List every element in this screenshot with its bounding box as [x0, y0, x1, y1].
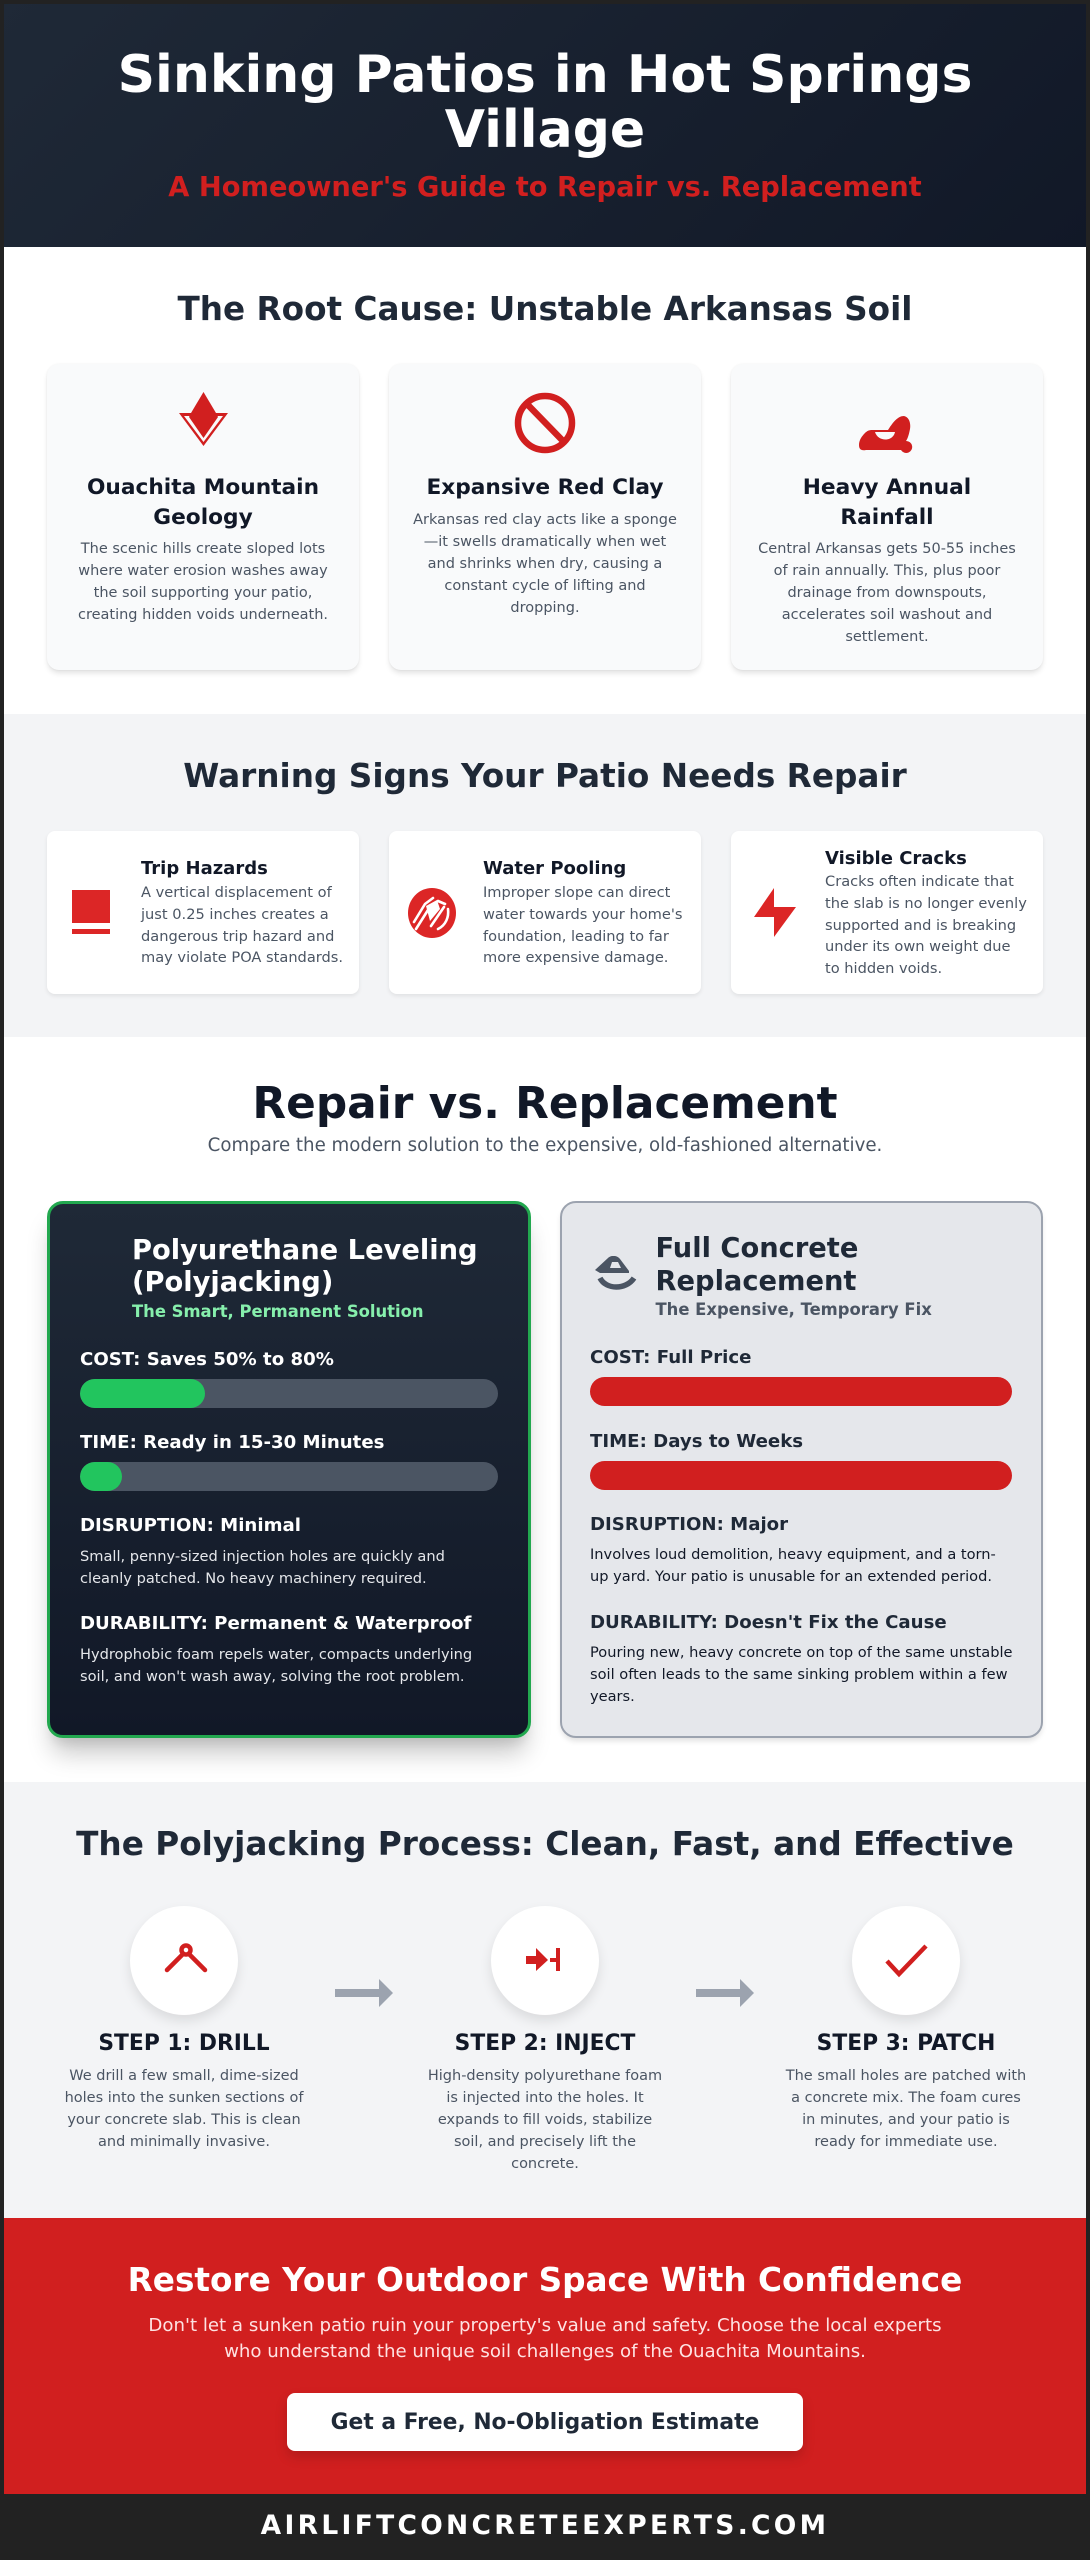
card: Heavy Annual Rainfall: accelerates soil washout and: [782, 607, 992, 623]
step 2: inject: [428, 1906, 662, 2172]
card: Trip Hazards: just 0.25 inches creates a: [141, 906, 329, 923]
step 3: patch: The small holes are patched with: [786, 2068, 1026, 2084]
card: Trip Hazards: [47, 831, 359, 994]
card title: full concrete: [656, 1232, 858, 1296]
step 1: drill: [65, 1906, 304, 2150]
card: Ouachita Mountain Geology: the soil supporting your patio,: [94, 585, 312, 601]
card: Visible Cracks: Cracks often indicate that: [825, 873, 1014, 890]
subheading: compare: Compare the modern solution to the expensive, old-fashioned alternative.: [208, 1135, 882, 1156]
text: durability detail: years.: [590, 1688, 635, 1705]
text: durability detail: [590, 1644, 1013, 1705]
text: disruption detail: up yard. Your patio is unusable for an extended period.: [590, 1568, 992, 1585]
icon: demolition trowel: [595, 1256, 636, 1290]
card subtitle: expensive: The Expensive, Temporary Fix: [656, 1300, 932, 1319]
button: free estimate: [287, 2393, 803, 2451]
card: Heavy Annual Rainfall: Rainfall: [840, 504, 934, 530]
panel: process section: [0, 1782, 1090, 2218]
card: Expansive Red Clay: —it swells dramatically when wet: [424, 534, 666, 550]
title: Village: [445, 100, 645, 160]
step 3: patch: STEP 3: PATCH: [817, 2031, 995, 2056]
card: Water Pooling: water towards your home's: [483, 906, 682, 923]
card: Ouachita Mountain Geology: where water erosion washes away: [78, 563, 328, 579]
card: Expansive Red Clay: and shrinks when dry, causing a: [428, 556, 662, 572]
text: disruption detail: Involves loud demolition, heavy equipment, and a torn-: [590, 1546, 996, 1563]
icon circle: inject: [491, 1906, 599, 2015]
card: Visible Cracks: the slab is no longer evenly: [825, 895, 1027, 912]
panel: warning signs section: [0, 714, 1090, 1037]
title: [118, 45, 972, 160]
icon: crack bolt: [754, 888, 796, 937]
text: durability detail: soil often leads to the same sinking problem within a few: [590, 1666, 1008, 1683]
card: Ouachita Mountain Geology: Ouachita Mountain: [87, 475, 319, 500]
step 1: drill: We drill a few small, dime-sized: [69, 2068, 299, 2084]
bar: cost 30 percent: [80, 1379, 498, 1408]
step 2: inject: STEP 2: INJECT: [455, 2031, 635, 2056]
heading: process: The Polyjacking Process: Clean, Fast, and Effective: [76, 1825, 1014, 1863]
step 3: patch: in minutes, and your patio is: [802, 2112, 1010, 2128]
title: Sinking Patios in Hot Springs: [118, 45, 972, 105]
text: call to action: who understand the unique soil challenges of the Ouachita Mountains.: [224, 2340, 866, 2362]
heading: root cause: The Root Cause: Unstable Arkansas Soil: [178, 290, 912, 328]
icon: trip hazard block: [72, 890, 110, 934]
card title: full concrete: Replacement: [656, 1266, 856, 1296]
panel: polyurethane leveling: [47, 1201, 530, 1738]
step 3: patch: [786, 1906, 1026, 2150]
card: Water Pooling: foundation, leading to far: [483, 928, 669, 945]
button: free estimate: Get a Free, No-Obligation Estimate: [331, 2410, 759, 2435]
arrow: step 2 to 3: [696, 1979, 754, 2007]
bar: time full: [590, 1461, 1012, 1490]
text: disruption detail: cleanly patched. No heavy machinery required.: [80, 1570, 427, 1586]
step 2: inject: expands to fill voids, stabilize: [438, 2112, 652, 2128]
metric: disruption: DISRUPTION: Major: [590, 1514, 788, 1535]
step 2: inject: concrete.: [511, 2156, 579, 2172]
card: Water Pooling: [389, 831, 701, 994]
card: Visible Cracks: under its own weight due: [825, 938, 1010, 955]
card title: full concrete: Full Concrete: [656, 1232, 858, 1264]
step 1: drill: holes into the sunken sections of: [65, 2090, 303, 2106]
card: Trip Hazards: A vertical displacement of: [141, 884, 332, 901]
heading: warning signs: Warning Signs Your Patio Needs Repair: [183, 757, 907, 795]
step 1: drill: STEP 1: DRILL: [98, 2031, 270, 2056]
step 2: inject: soil, and precisely lift the: [454, 2134, 636, 2150]
card: Trip Hazards: Trip Hazards: [141, 858, 268, 879]
icon circle: patch: [852, 1906, 960, 2015]
subtitle: A Homeowner's Guide to Repair vs. Replacement: [168, 172, 922, 203]
card: Visible Cracks: supported and is breaking: [825, 917, 1016, 934]
step 1: drill: and minimally invasive.: [98, 2134, 270, 2150]
card: Expansive Red Clay: constant cycle of lifting and: [444, 578, 646, 594]
metric: durability: DURABILITY: Permanent & Waterproof: [80, 1613, 471, 1634]
card: Visible Cracks: [731, 831, 1043, 994]
metric: cost: COST: Full Price: [590, 1346, 751, 1368]
step 1: drill: your concrete slab. This is clean: [67, 2112, 301, 2128]
bar: time 10 percent: [80, 1462, 498, 1491]
text: disruption detail: [590, 1546, 996, 1585]
metric: disruption: DISRUPTION: Minimal: [80, 1515, 301, 1536]
card: Trip Hazards: dangerous trip hazard and: [141, 928, 334, 945]
text: durability detail: [80, 1646, 472, 1685]
step 2: inject: High-density polyurethane foam: [428, 2068, 662, 2084]
metric: cost: COST: Saves 50% to 80%: [80, 1349, 334, 1370]
icon: rainfall blob: [859, 416, 912, 453]
card: Ouachita Mountain Geology: [47, 364, 359, 670]
panel: full concrete replacement: [560, 1201, 1043, 1738]
text: disruption detail: [80, 1548, 445, 1586]
card title: polyjacking: [132, 1234, 478, 1298]
heading: call to action: Restore Your Outdoor Space With Confidence: [128, 2261, 962, 2299]
card: Water Pooling: more expensive damage.: [483, 949, 668, 966]
card: Ouachita Mountain Geology: creating hidden voids underneath.: [78, 607, 328, 623]
text: durability detail: soil, and won't wash away, solving the root problem.: [80, 1668, 465, 1685]
step 3: patch: ready for immediate use.: [814, 2134, 998, 2150]
text: disruption detail: Small, penny-sized injection holes are quickly and: [80, 1548, 445, 1564]
icon: mountain diamond: [179, 392, 228, 446]
card: Heavy Annual Rainfall: Heavy Annual: [803, 475, 971, 500]
card: Heavy Annual Rainfall: settlement.: [845, 629, 929, 645]
card: Expansive Red Clay: Expansive Red Clay: [426, 475, 664, 500]
card: Ouachita Mountain Geology: The scenic hills create sloped lots: [81, 541, 325, 557]
card subtitle: smart: The Smart, Permanent Solution: [132, 1302, 424, 1321]
card: Water Pooling: Improper slope can direct: [483, 884, 670, 901]
text: durability detail: Hydrophobic foam repels water, compacts underlying: [80, 1646, 472, 1663]
icon: water pooling circle: [408, 888, 456, 938]
panel: call to action: [0, 2218, 1090, 2494]
metric: durability: DURABILITY: Doesn't Fix the Cause: [590, 1612, 947, 1633]
panel: root cause section: [0, 247, 1090, 714]
card: Expansive Red Clay: Arkansas red clay acts like a sponge: [413, 512, 677, 528]
footer website: AIRLIFTCONCRETEEXPERTS.COM: [261, 2510, 829, 2541]
card: Ouachita Mountain Geology: Geology: [153, 504, 253, 530]
bar: cost full: [590, 1377, 1012, 1406]
card: Visible Cracks: to hidden voids.: [825, 960, 942, 977]
panel: repair vs replacement header: [0, 1037, 1090, 1782]
icon circle: drill: [130, 1906, 238, 2015]
icon: prohibited circle: [514, 392, 576, 454]
step 3: patch: a concrete mix. The foam cures: [791, 2090, 1021, 2106]
panel: header banner: [0, 0, 1090, 247]
card: Heavy Annual Rainfall: drainage from downspouts,: [787, 585, 987, 601]
text: durability detail: Pouring new, heavy concrete on top of the same unstable: [590, 1644, 1013, 1661]
card: Expansive Red Clay: dropping.: [510, 600, 580, 616]
card title: polyjacking: Polyurethane Leveling: [132, 1234, 478, 1266]
card: Water Pooling: Water Pooling: [483, 858, 626, 879]
card: Expansive Red Clay: [389, 364, 701, 670]
metric: time: TIME: Days to Weeks: [590, 1430, 803, 1452]
card: Visible Cracks: Visible Cracks: [825, 848, 967, 869]
metric: time: TIME: Ready in 15-30 Minutes: [80, 1432, 384, 1453]
panel: footer: [0, 2494, 1090, 2560]
text: call to action: Don't let a sunken patio ruin your property's value and safety. Choose the local experts: [148, 2315, 942, 2336]
card title: polyjacking: (Polyjacking): [132, 1267, 333, 1298]
card: Heavy Annual Rainfall: [731, 364, 1043, 670]
card: Trip Hazards: may violate POA standards.: [141, 949, 343, 966]
heading: repair vs replacement: Repair vs. Replacement: [252, 1078, 838, 1129]
arrow: step 1 to 2: [335, 1979, 393, 2007]
text: call to action: [148, 2315, 942, 2362]
step 2: inject: is injected into the holes. It: [446, 2090, 644, 2106]
card: Heavy Annual Rainfall: of rain annually. This, plus poor: [774, 563, 1000, 579]
card: Heavy Annual Rainfall: Central Arkansas gets 50-55 inches: [758, 541, 1016, 557]
